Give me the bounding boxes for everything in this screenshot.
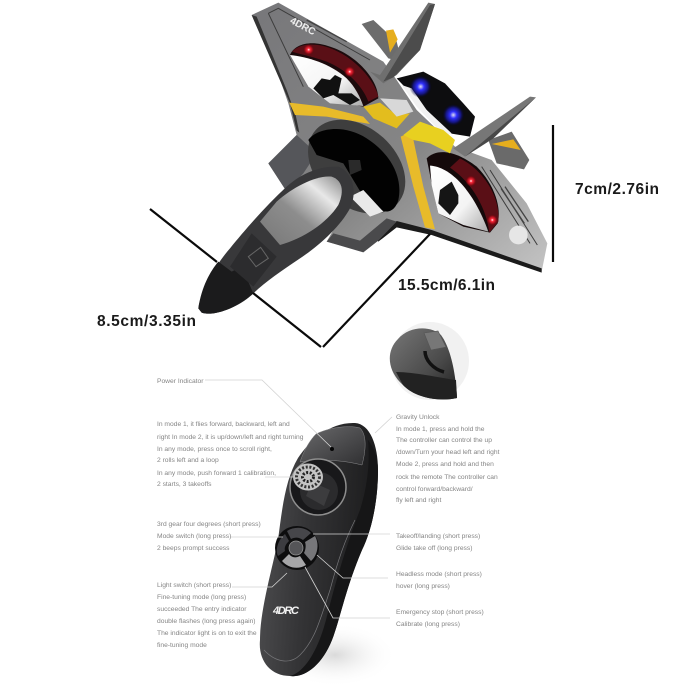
vertical fins xyxy=(370,3,536,157)
text: takeoff xyxy=(396,533,480,552)
power indicator hole xyxy=(330,447,334,451)
text: light switch: fine-tuning mode xyxy=(157,642,207,649)
text: joystick description: In any mode, press once to scroll right, xyxy=(157,446,272,453)
text: joystick description: 2 rolls left and a loop xyxy=(157,457,219,464)
text: light switch: succeeded The entry indicator xyxy=(157,606,247,613)
remote controller xyxy=(260,423,378,676)
inset: gravity unlock button xyxy=(390,322,469,400)
text: emergency stop xyxy=(396,609,484,628)
engine bumps with blue lights xyxy=(397,72,475,137)
length label: 8.5cm/3.35in xyxy=(97,313,196,330)
text: gravity unlock: Mode 2, press and hold and then xyxy=(396,461,494,468)
dimension line: length xyxy=(97,209,321,347)
text: emergency stop: Calibrate (long press) xyxy=(396,621,460,628)
text: takeoff: Glide take off (long press) xyxy=(396,545,472,552)
text: gravity unlock: fly left and right xyxy=(396,497,441,504)
leader lines xyxy=(205,380,392,618)
wing marks: 4DRC xyxy=(288,16,317,38)
top panel xyxy=(300,427,365,465)
dimension line: width xyxy=(323,234,495,347)
text: mode switch: 2 beeps prompt success xyxy=(157,545,230,552)
fuselage and nose xyxy=(198,167,354,314)
text: emergency stop: Emergency stop (short press) xyxy=(396,609,484,616)
wings and body xyxy=(252,3,547,272)
text: power indicator: Power Indicator xyxy=(157,378,204,385)
text: light switch: double flashes (long press again) xyxy=(157,618,256,625)
text: takeoff: Takeoff/landing (short press) xyxy=(396,533,480,540)
text: joystick description: right In mode 2, it is up/down/left and right turning xyxy=(157,434,304,441)
text: light switch: Light switch (short press) xyxy=(157,582,231,589)
direction pad xyxy=(275,526,319,570)
text: gravity unlock: The controller can control the up xyxy=(396,437,492,444)
remote shadow xyxy=(273,623,397,687)
dimension line: height xyxy=(553,125,659,262)
left propeller bay xyxy=(290,43,378,107)
panel lines on wings xyxy=(268,8,537,245)
text: light switch: The indicator light is on to exit the xyxy=(157,630,257,637)
text: light switch xyxy=(157,582,257,649)
text: gravity unlock: rock the remote The controller can xyxy=(396,474,498,481)
text: gravity unlock: In mode 1, press and hold the xyxy=(396,426,485,433)
drone aircraft xyxy=(198,3,547,314)
central fan opening xyxy=(289,101,424,233)
joystick xyxy=(290,459,346,515)
height label: 7cm/2.76in xyxy=(575,181,659,198)
rear stabilizer right xyxy=(488,132,529,169)
yellow stripes xyxy=(289,98,455,229)
text: mode switch: Mode switch (long press) xyxy=(157,533,231,540)
text: headless: hover (long press) xyxy=(396,583,450,590)
text: light switch: Fine-tuning mode (long press) xyxy=(157,594,246,601)
text: joystick description xyxy=(157,421,304,488)
text: mode switch: 3rd gear four degrees (short press) xyxy=(157,521,261,528)
text: mode switch xyxy=(157,521,261,552)
text: joystick description: 2 starts, 3 takeoffs xyxy=(157,481,212,488)
text: joystick description: In any mode, push forward 1 calibration, xyxy=(157,470,276,477)
text: gravity unlock xyxy=(396,414,500,504)
text: joystick description: In mode 1, it flies forward, backward, left and xyxy=(157,421,290,428)
text: headless: Headless mode (short press) xyxy=(396,571,482,578)
rear stabilizer left xyxy=(362,20,402,62)
canopy xyxy=(260,177,342,245)
text: headless xyxy=(396,571,482,590)
width label: 15.5cm/6.1in xyxy=(398,277,495,294)
text: gravity unlock: /down/Turn your head left and right xyxy=(396,449,500,456)
text: gravity unlock: Gravity Unlock xyxy=(396,414,440,421)
right propeller bay xyxy=(427,152,499,233)
brand logo: 4DRC xyxy=(272,605,300,617)
text: gravity unlock: control forward/backward/ xyxy=(396,486,473,493)
